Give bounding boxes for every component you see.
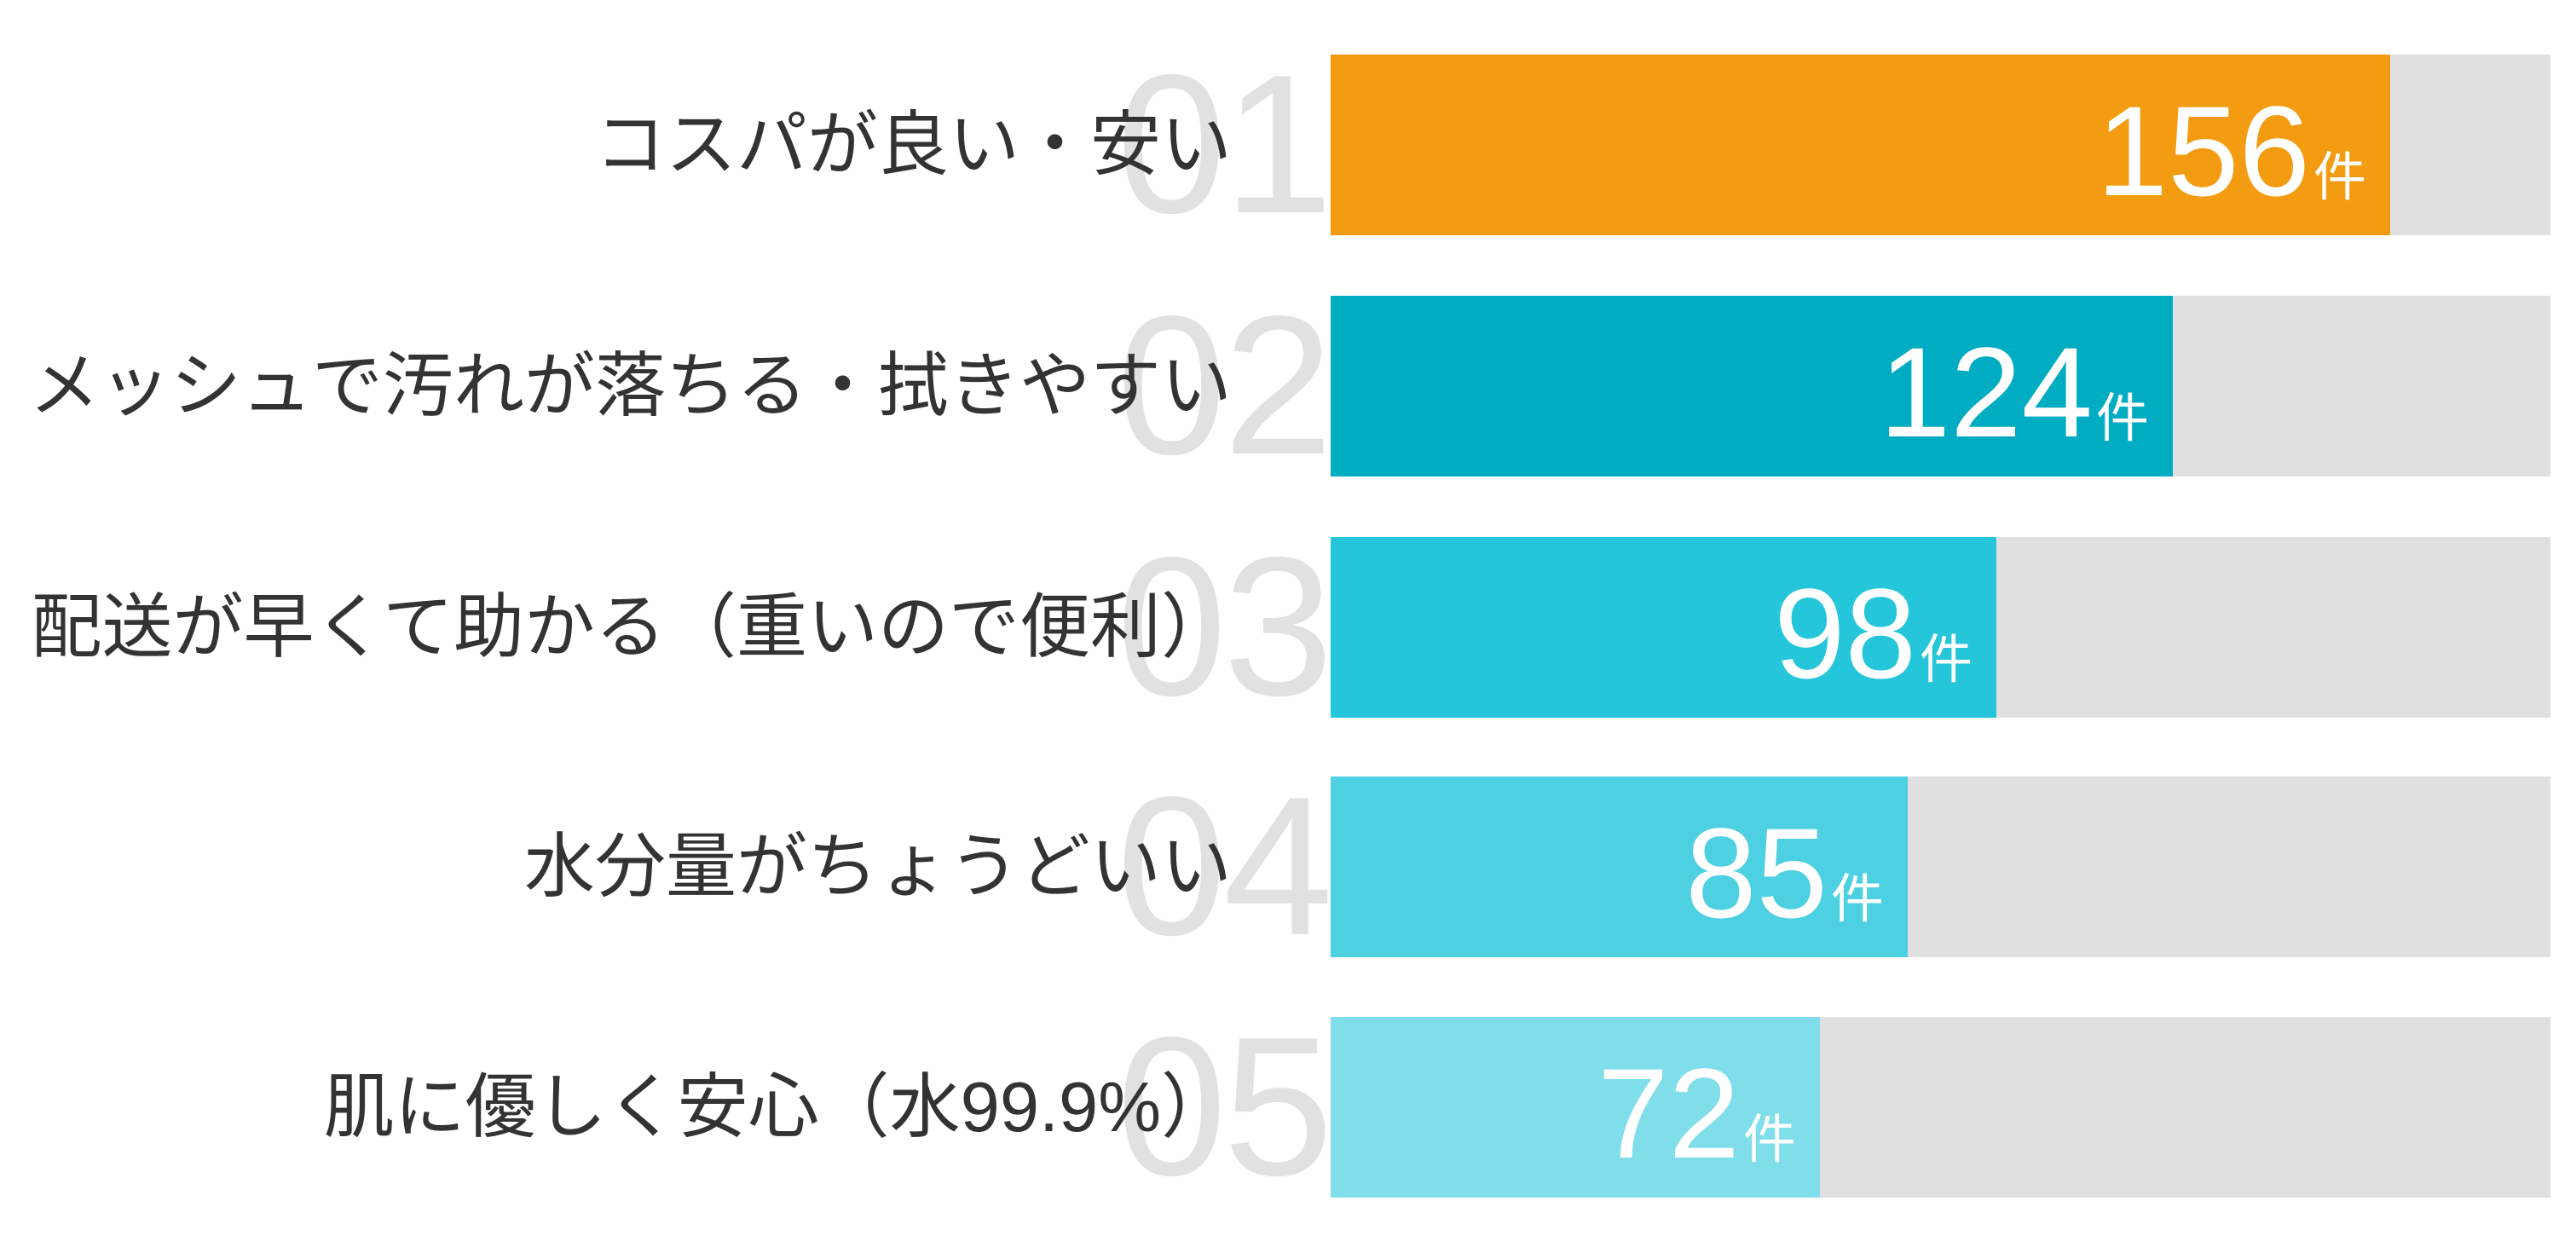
rank number 01: 01	[1117, 34, 1330, 255]
rank number 04: 04	[1117, 756, 1330, 977]
bar 4	[1331, 777, 2550, 957]
label 3: 配送が早くて助かる（重いので便利）	[31, 587, 1232, 667]
row 4	[524, 756, 2550, 977]
bar 2: 124件	[1880, 320, 2149, 464]
label 5: 肌に優しく安心（水99.9%）	[324, 1067, 1232, 1146]
bar 1	[1331, 55, 2550, 235]
bar 3	[1331, 537, 2550, 718]
rank number 05: 05	[1117, 996, 1330, 1217]
bar 5: 72件	[1597, 1042, 1796, 1185]
bar 1: 156件	[2097, 79, 2366, 222]
bar 4: 85件	[1685, 801, 1884, 944]
row 1	[595, 34, 2550, 255]
row 5	[324, 996, 2550, 1217]
bar 2	[1331, 296, 2550, 476]
bar 3: 98件	[1774, 562, 1972, 705]
bar 5	[1331, 1017, 2550, 1198]
row 2	[29, 275, 2550, 496]
label 2: メッシュで汚れが落ちる・拭きやすい	[29, 346, 1232, 425]
row 3	[31, 517, 2550, 737]
label 1: コスパが良い・安い	[595, 105, 1232, 184]
rank number 02: 02	[1117, 275, 1330, 496]
label 4: 水分量がちょうどいい	[524, 827, 1232, 906]
rank number 03: 03	[1117, 517, 1330, 737]
